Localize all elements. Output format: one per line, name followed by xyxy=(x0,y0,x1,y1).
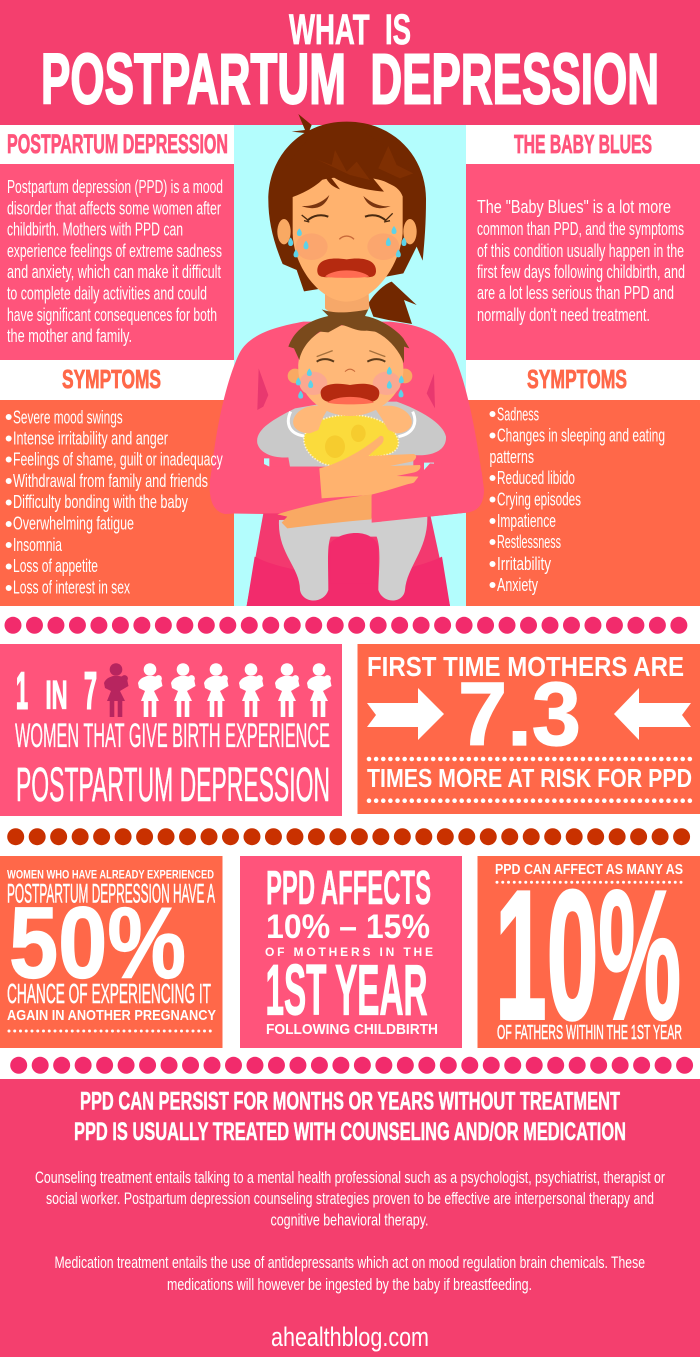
list: ppd symptoms: Withdrawal from family and friends xyxy=(13,471,208,491)
list: baby blues symptoms: Reduced libido xyxy=(497,468,575,488)
heading: symptoms right: SYMPTOMS xyxy=(527,364,627,394)
panel: ppd symptoms background xyxy=(0,400,234,606)
header banner xyxy=(0,0,700,125)
list: baby blues symptoms: Restlessness xyxy=(497,532,561,552)
list: ppd symptoms: Insomnia xyxy=(13,535,63,555)
text block: ppd definition: to complete daily activities and could xyxy=(7,284,207,304)
list: baby blues symptoms: Irritability xyxy=(497,554,551,574)
list: ppd symptoms: Loss of appetite xyxy=(13,556,98,576)
text: again in another pregnancy: AGAIN IN ANOTHER PREGNANCY xyxy=(7,1007,216,1024)
text block: ppd definition: and anxiety, which can make it difficult xyxy=(7,262,221,282)
stat panel: 1 in 7 xyxy=(0,644,342,816)
stat panel: 50 percent xyxy=(0,856,222,1048)
mother: neck xyxy=(325,287,369,317)
baby: cuffs xyxy=(288,412,415,437)
panel: postpartum depression xyxy=(0,129,234,360)
mother: left arm over sleeve xyxy=(210,463,321,514)
mother: bangs xyxy=(280,133,413,202)
text: women who have already experienced: WOMEN WHO HAVE ALREADY EXPERIENCED xyxy=(7,870,214,882)
baby: head xyxy=(298,325,403,416)
list: ppd symptoms: Intense irritability and anger xyxy=(13,428,168,448)
baby: crying mouth xyxy=(321,384,379,402)
baby: arch overlay xyxy=(331,533,377,583)
stat: 7.3: 7.3 xyxy=(458,665,581,765)
list: baby blues symptoms: Impatience xyxy=(497,511,556,531)
mother: closed eyes xyxy=(307,215,386,221)
baby: hair xyxy=(288,309,409,363)
mother: cheeks xyxy=(296,233,328,260)
baby: ears xyxy=(288,369,302,383)
baby: hands xyxy=(293,406,412,433)
divider dots: pink row three xyxy=(19,1057,685,1074)
list: baby blues symptoms xyxy=(490,404,665,595)
text: POSTPARTUM DEPRESSION HAVE A xyxy=(7,879,215,909)
baby: legs xyxy=(279,517,427,600)
text block: medication treatment xyxy=(54,1253,645,1294)
stat panel: first time mothers 7.3 xyxy=(358,644,700,814)
text block: ppd definition: Postpartum depression (PPD) is a mood xyxy=(7,177,223,197)
title: what is: WHAT IS xyxy=(289,6,411,54)
baby: eyes and brows xyxy=(317,359,385,362)
text block: medication treatment: medications will however be ingested by the baby if breastfeeding. xyxy=(167,1275,532,1294)
mother: ponytail xyxy=(368,282,417,324)
mother: crying mouth xyxy=(317,258,376,277)
baby: nose xyxy=(345,369,355,372)
stat: 1 in 7: 1 xyxy=(16,662,28,720)
divider dots: pink row one xyxy=(13,617,679,634)
mother: ears xyxy=(277,219,291,244)
text block: counseling treatment: cognitive behavioral therapy. xyxy=(270,1211,428,1230)
arrow: pointing left xyxy=(614,688,691,740)
stat: 10% - 15%: 10% – 15% xyxy=(266,908,430,946)
brand: ahealthblog.com: ahealthblog.com xyxy=(271,1322,429,1352)
text block: ppd definition: have significant consequences for both xyxy=(7,305,217,325)
baby: cheeks xyxy=(299,372,327,395)
stat panel: ppd affects 10-15 percent: PPD AFFECTS xyxy=(266,862,431,915)
icon row: seven mothers, one highlighted xyxy=(104,663,332,717)
mother: face xyxy=(293,177,403,302)
text: of mothers in the: OF MOTHERS IN THE xyxy=(265,945,433,959)
list: ppd symptoms: Severe mood swings xyxy=(13,407,123,427)
list: ppd symptoms: Loss of interest in sex xyxy=(13,578,130,598)
arrow: pointing right xyxy=(367,688,444,740)
mother: right sleeve xyxy=(372,463,484,523)
illustration: crying mother holding crying baby xyxy=(210,114,484,606)
mother: tears xyxy=(288,226,406,257)
list: baby blues symptoms: patterns xyxy=(490,447,534,467)
list: ppd symptoms: Overwhelming fatigue xyxy=(13,514,134,534)
text: POSTPARTUM DEPRESSION xyxy=(16,759,330,812)
text block: ppd definition: the mother and family. xyxy=(7,326,132,346)
list: baby blues symptoms: Sadness xyxy=(497,404,539,424)
list: ppd symptoms: Difficulty bonding with the baby xyxy=(13,492,188,512)
mother: pink arch between baby legs xyxy=(328,534,378,583)
panel: baby blues symptoms background xyxy=(466,400,700,606)
list: baby blues symptoms: Anxiety xyxy=(497,575,538,595)
stat panel: ppd affects 10-15 percent xyxy=(240,856,462,1048)
stat: 50%: 50% xyxy=(9,888,186,1000)
baby: bib xyxy=(304,415,399,466)
mother: nose xyxy=(339,236,354,239)
text block: ppd definition: childbirth. Mothers with PPD can xyxy=(7,220,183,240)
stat panel: 1 in 7: 7 xyxy=(84,662,97,720)
heading: symptoms left: SYMPTOMS xyxy=(62,364,161,394)
stat: 1 in 7 xyxy=(16,662,97,720)
mother: upper hand xyxy=(319,436,420,498)
text block: counseling treatment xyxy=(35,1168,665,1230)
stat panel: 10 percent of fathers xyxy=(478,852,700,1058)
text block: ppd definition xyxy=(7,177,223,346)
list: ppd symptoms xyxy=(6,407,223,598)
divider dots: red row two xyxy=(16,828,682,845)
stat panel: 50 percent: CHANCE OF EXPERIENCING IT xyxy=(7,978,211,1009)
mother: body and dress xyxy=(210,322,484,606)
baby: sleeves and body xyxy=(257,402,446,467)
text block: baby blues definition xyxy=(477,197,685,325)
mother: lower forearm xyxy=(277,494,372,528)
illustration background xyxy=(234,125,466,606)
stat: 1 in 7: IN xyxy=(46,674,68,718)
list: baby blues symptoms: Crying episodes xyxy=(497,490,581,510)
text block: ppd definition: experience feelings of extreme sadness xyxy=(7,241,222,261)
mother: hair back xyxy=(268,114,426,291)
text block: ppd definition: disorder that affects some women after xyxy=(7,198,221,218)
panel: treatment xyxy=(0,1079,700,1357)
text: WOMEN THAT GIVE BIRTH EXPERIENCE xyxy=(15,717,330,755)
stat panel: ppd affects 10-15 percent: 1ST YEAR xyxy=(266,952,428,1030)
heading: postpartum depression: POSTPARTUM DEPRESSION xyxy=(7,129,228,159)
list: ppd symptoms: Feelings of shame, guilt or inadequacy xyxy=(13,450,223,470)
panel: the baby blues xyxy=(466,129,700,360)
mother: eyebrows xyxy=(302,195,391,208)
baby: tears xyxy=(296,367,404,399)
text: following childbirth: FOLLOWING CHILDBIRTH xyxy=(266,1021,438,1038)
